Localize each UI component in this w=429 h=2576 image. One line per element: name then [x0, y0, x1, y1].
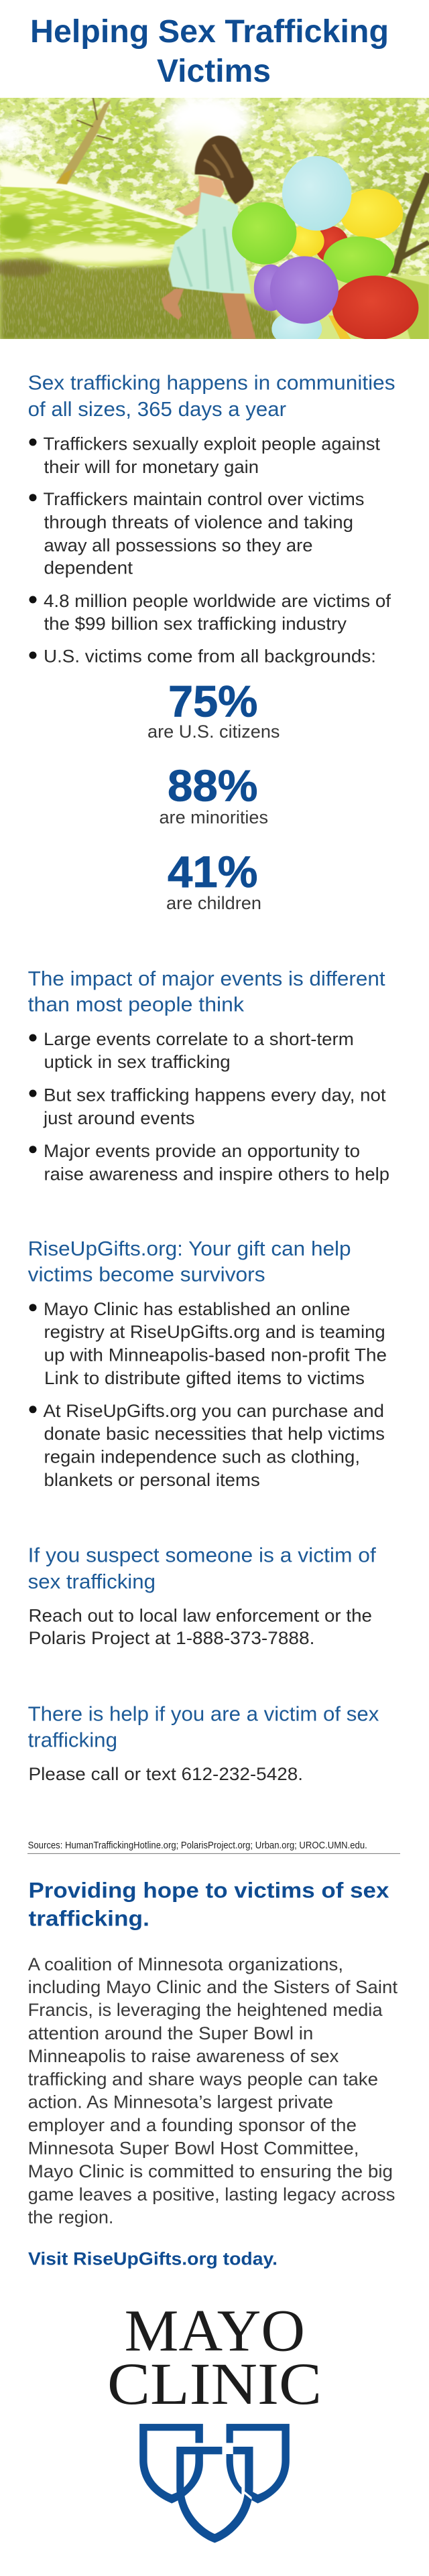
bullet list: trafficking facts: Traffickers sexually exploit people against — [43, 434, 380, 454]
paragraph: coalition: the region. — [28, 2207, 113, 2227]
photo: girl running with balloons — [0, 91, 429, 346]
bullet list: trafficking facts: the $99 billion sex trafficking industry — [44, 614, 347, 634]
paragraph: coalition: Minneapolis to raise awareness of sex — [28, 2046, 339, 2066]
section: help for victims: There is help if you are a victim of sex — [28, 1702, 379, 1725]
paragraph: coalition: Mayo Clinic is committed to ensuring the big — [28, 2161, 393, 2181]
sources: Sources: HumanTraffickingHotline.org; PolarisProject.org; Urban.org; UROC.UMN.edu. — [28, 1840, 367, 1851]
section heading: communities: of all sizes, 365 days a year — [28, 397, 286, 421]
statistic: 75 percent — [147, 676, 280, 742]
bullet list: RiseUpGifts: At RiseUpGifts.org you can purchase and — [43, 1401, 384, 1421]
section heading: RiseUpGifts — [28, 1237, 351, 1286]
paragraph: coalition: employer and a founding sponsor of the — [28, 2115, 357, 2135]
bullet list: RiseUpGifts: Link to distribute gifted items to victims — [44, 1368, 365, 1388]
logo: Mayo Clinic wordmark: MAYO — [125, 2298, 305, 2364]
paragraph: coalition: A coalition of Minnesota organizations, — [28, 1954, 343, 1974]
call to action: Visit RiseUpGifts.org today. — [28, 2248, 278, 2268]
bullet list: trafficking facts: dependent — [44, 557, 133, 578]
photo foliage texture — [0, 98, 429, 275]
statistic: 41 percent — [166, 847, 261, 913]
section: help for victims: trafficking — [28, 1728, 117, 1752]
section heading: RiseUpGifts: victims become survivors — [28, 1263, 265, 1286]
bullet list: RiseUpGifts: regain independence such as clothing, — [44, 1447, 360, 1467]
bullet list: major events: raise awareness and inspire others to help — [44, 1164, 389, 1184]
bullet list: RiseUpGifts: Mayo Clinic has established an online — [44, 1299, 350, 1319]
bullet list: RiseUpGifts: registry at RiseUpGifts.org and is teaming — [44, 1322, 385, 1342]
photo: girl — [162, 135, 256, 339]
bullet list: RiseUpGifts: up with Minneapolis-based non-profit The — [44, 1345, 387, 1365]
section: if you suspect someone: Reach out to local law enforcement or the — [28, 1605, 372, 1625]
paragraph: coalition: Minnesota Super Bowl Host Committee, — [28, 2138, 359, 2158]
bullet list: major events: Large events correlate to a short-term — [44, 1029, 354, 1049]
bullet list: trafficking facts: through threats of violence and taking — [44, 513, 353, 533]
bullet list: trafficking facts: U.S. victims come from all backgrounds: — [44, 646, 376, 666]
bullet list: major events: Major events provide an opportunity to — [44, 1141, 360, 1161]
bullet list: trafficking facts: away all possessions so they are — [44, 535, 312, 555]
photo sky glow — [0, 91, 345, 178]
section heading: communities — [28, 371, 395, 421]
bullet list: major events — [29, 1029, 389, 1184]
logo: three shields — [139, 2424, 290, 2543]
bullet list: RiseUpGifts: donate basic necessities that help victims — [44, 1424, 385, 1444]
logo: Mayo Clinic wordmark: CLINIC — [107, 2352, 322, 2417]
photo foliage base — [0, 98, 429, 226]
heading: providing hope — [28, 1879, 389, 1931]
photo: right side grass — [391, 275, 429, 340]
bullet list: trafficking facts: their will for monetary gain — [44, 457, 259, 477]
section heading: major events: than most people think — [28, 993, 245, 1016]
section heading: communities: Sex trafficking happens in communities — [28, 371, 395, 394]
paragraph: coalition: action. As Minnesota’s largest private — [28, 2092, 333, 2112]
statistic: 75 percent: 75% — [168, 676, 257, 726]
statistic: 88 percent — [160, 761, 268, 827]
statistic: 41 percent: 41% — [168, 847, 257, 896]
title: Helping Sex Trafficking — [30, 14, 389, 50]
section heading: major events: The impact of major events is different — [28, 967, 385, 990]
paragraph: coalition: game leaves a positive, lasting legacy across — [28, 2184, 395, 2204]
title — [30, 14, 389, 89]
photo: tree trunks — [56, 98, 429, 273]
paragraph: coalition: attention around the Super Bowl in — [28, 2023, 313, 2043]
photo: bright grass — [0, 187, 197, 269]
bullet list: major events: just around events — [43, 1108, 195, 1128]
statistic: 41 percent: are children — [166, 893, 261, 913]
section: if you suspect someone: If you suspect someone is a victim of — [28, 1544, 376, 1567]
photo: dark grass — [0, 258, 288, 340]
statistic: 88 percent: are minorities — [160, 807, 268, 827]
heading: providing hope: trafficking. — [28, 1907, 149, 1931]
logo: Mayo Clinic wordmark — [107, 2298, 322, 2417]
section: if you suspect someone: sex trafficking — [28, 1570, 156, 1593]
bullet list: major events: But sex trafficking happens every day, not — [44, 1085, 386, 1105]
section: help for victims — [28, 1702, 379, 1784]
bullet list: trafficking facts: Traffickers maintain control over victims — [43, 489, 365, 509]
photo: hill white band — [0, 158, 197, 228]
paragraph: coalition: including Mayo Clinic and the Sisters of Saint — [28, 1977, 398, 1997]
bullet list: RiseUpGifts: blankets or personal items — [44, 1470, 260, 1490]
title: Victims — [157, 54, 271, 89]
paragraph: coalition: Francis, is leveraging the heightened media — [28, 2000, 383, 2020]
section: if you suspect someone — [28, 1544, 376, 1648]
photo: balloons — [232, 156, 418, 346]
bullet list: trafficking facts: 4.8 million people worldwide are victims of — [44, 591, 391, 611]
heading: providing hope: Providing hope to victims of sex — [28, 1879, 389, 1903]
paragraph: coalition — [28, 1954, 398, 2227]
paragraph: coalition: trafficking and share ways people can take — [28, 2069, 378, 2089]
statistic: 88 percent: 88% — [168, 761, 257, 811]
bullet list: RiseUpGifts — [29, 1299, 387, 1490]
statistic: 75 percent: are U.S. citizens — [147, 722, 280, 742]
bullet list: major events: uptick in sex trafficking — [44, 1052, 231, 1072]
bullet list: trafficking facts — [29, 434, 391, 666]
section: if you suspect someone: Polaris Project at 1-888-373-7888. — [28, 1628, 314, 1648]
section heading: major events — [28, 967, 385, 1016]
section: help for victims: Please call or text 612-232-5428. — [28, 1764, 303, 1784]
section heading: RiseUpGifts: RiseUpGifts.org: Your gift can help — [28, 1237, 351, 1260]
